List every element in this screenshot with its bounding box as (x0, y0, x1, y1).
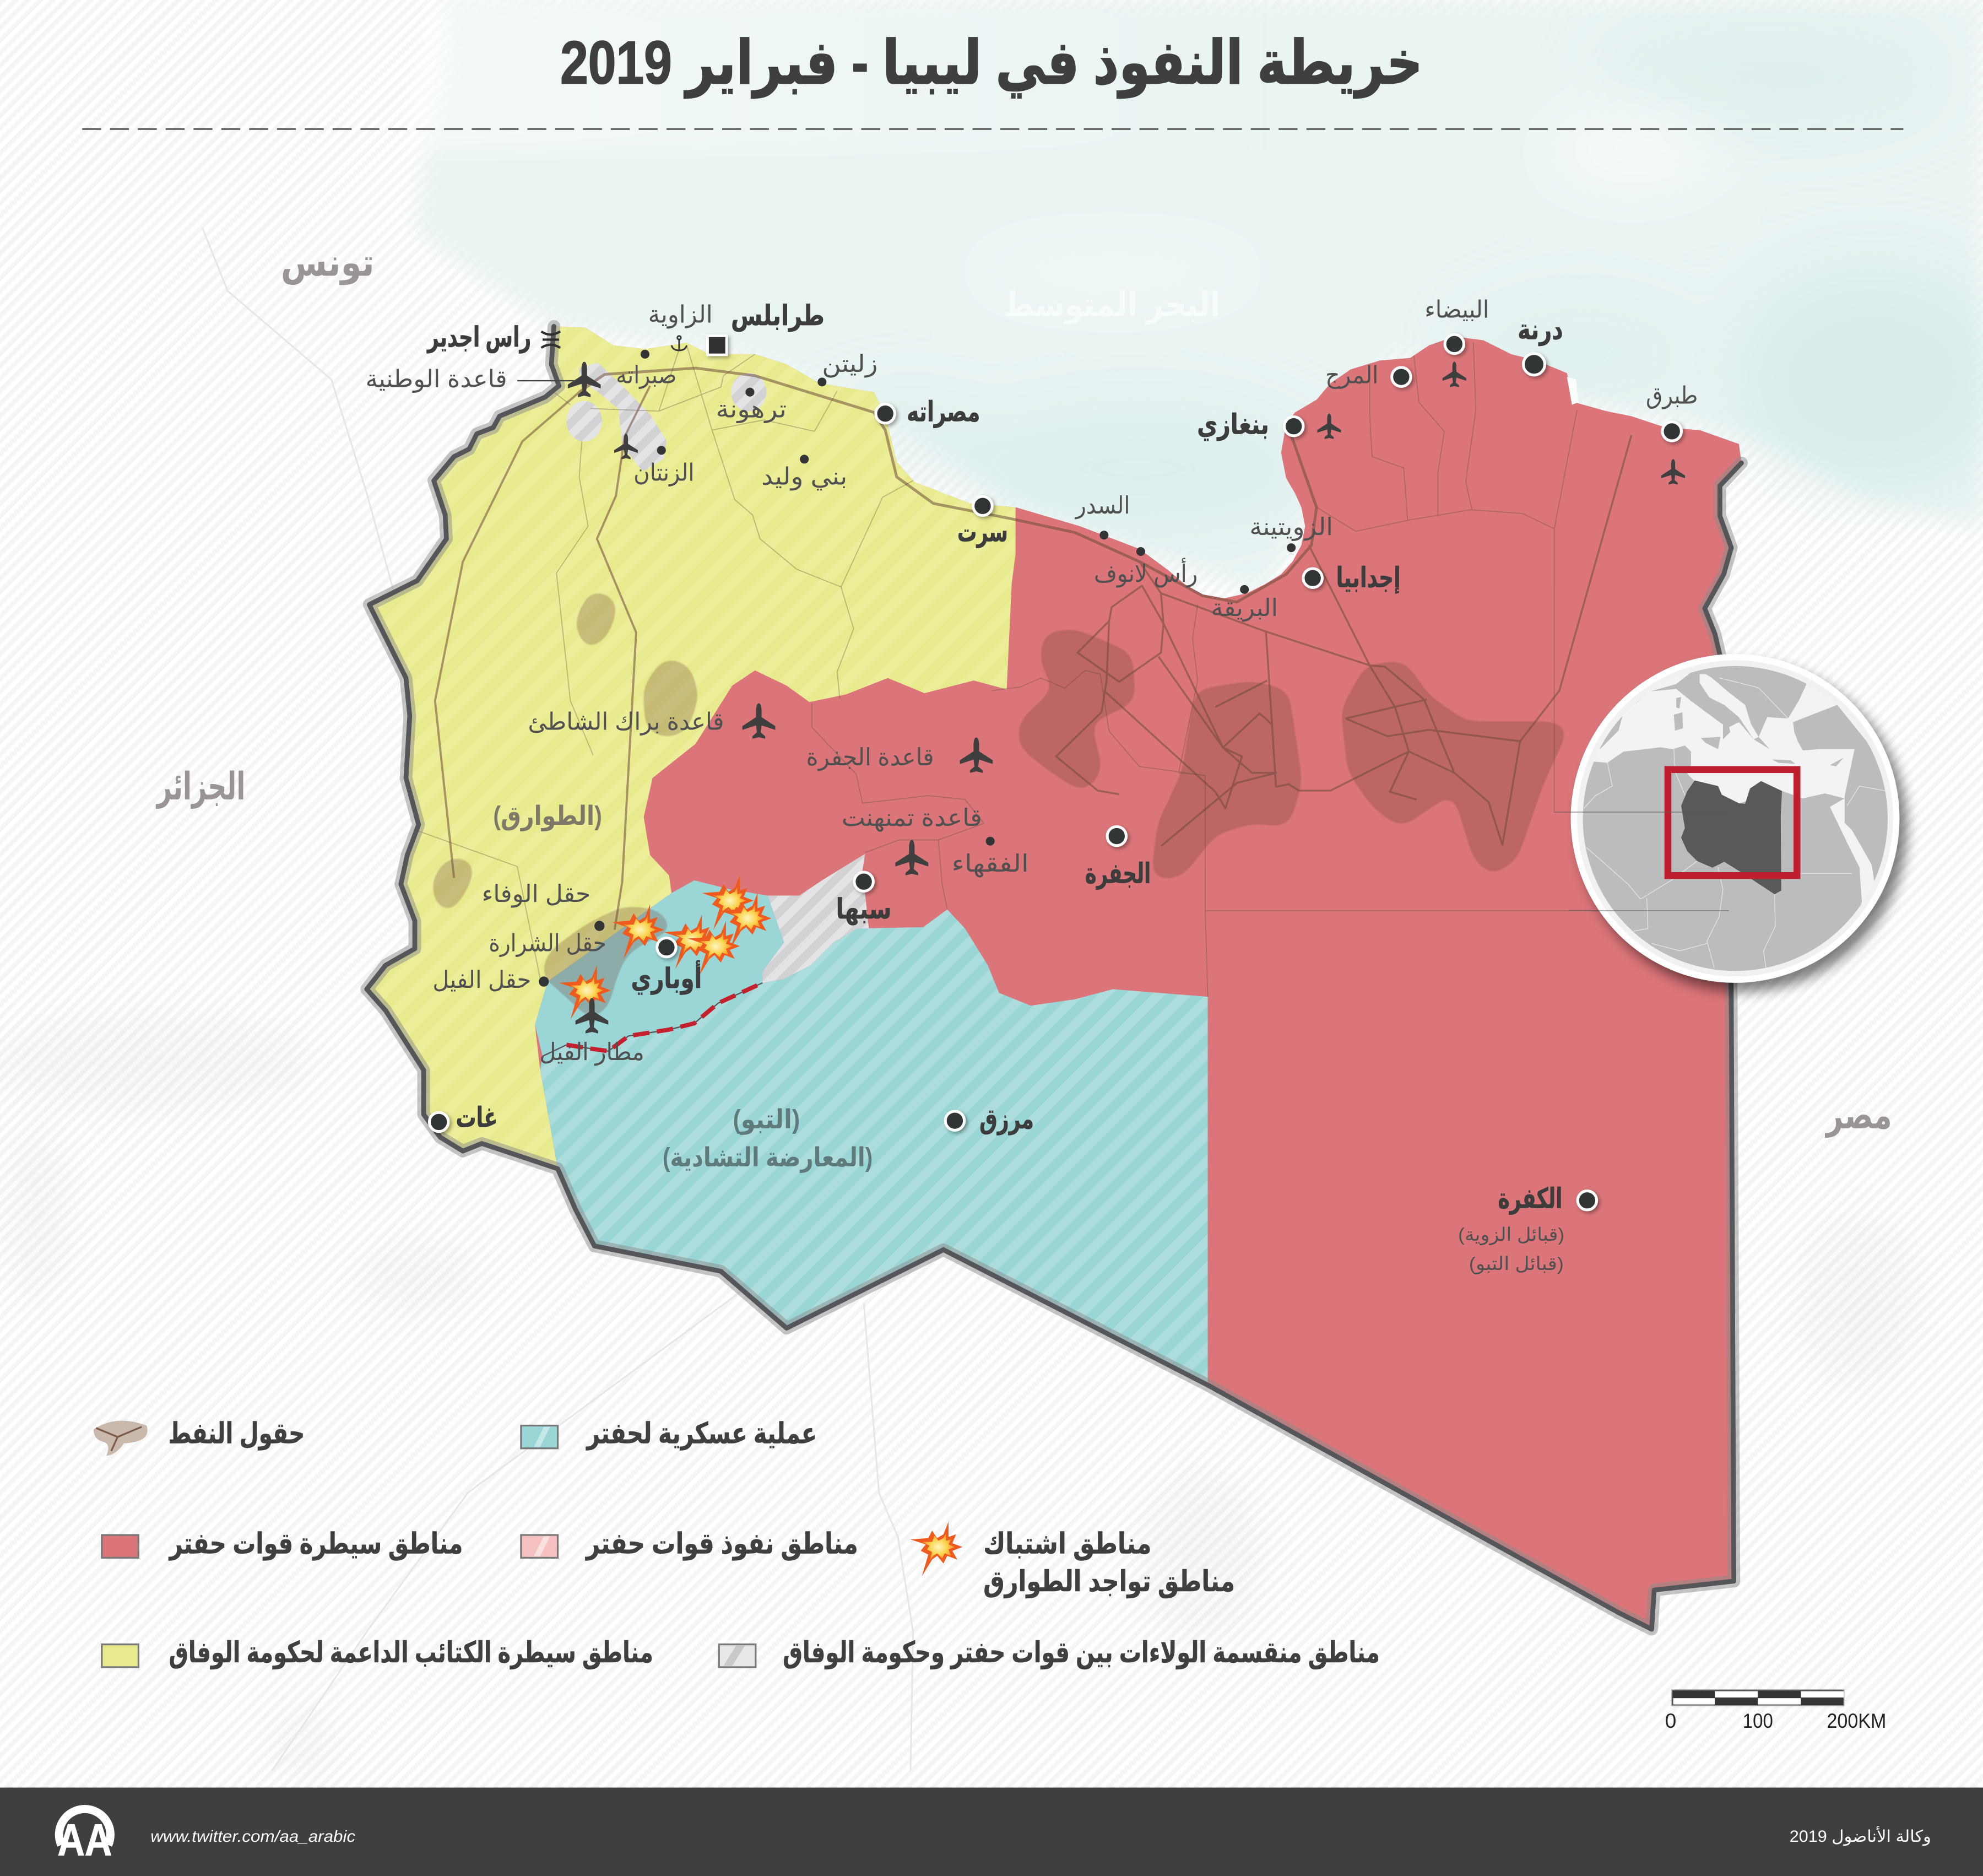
legend: Haftar influence (521, 1527, 858, 1560)
label: Algeria: الجزائر (156, 765, 245, 809)
label: Fuqaha: الفقهاء (952, 851, 1029, 878)
legend: Haftar control (102, 1527, 463, 1560)
oil fields (439, 597, 1561, 1012)
label: El Feel airport: مطار الفيل (539, 1039, 644, 1066)
label: Zliten: زليتن (822, 351, 877, 378)
swatch: pink (521, 1535, 557, 1558)
globe inner ring (1577, 660, 1893, 976)
region: Haftar military operation, south (striped teal) (540, 910, 1208, 1385)
swatch: teal (521, 1425, 557, 1448)
label: Tuareg: (الطوارق) (493, 801, 602, 831)
label: Sirte: سرت (957, 516, 1008, 549)
region: divided loyalties near Sebha (grey) (762, 854, 869, 983)
district boundaries (415, 343, 1729, 997)
Spain land (1581, 693, 1639, 749)
label: Chadian opposition: (المعارضة التشادية) (663, 1143, 873, 1173)
label: Tunisia: تونس (281, 241, 375, 285)
clash explosions (559, 875, 772, 1019)
text: military operation: عملية عسكرية لحفتر (586, 1418, 817, 1451)
faint desert texture (0, 1012, 1922, 1783)
label: Zawiya: الزاوية (648, 301, 713, 328)
label: Ghat: غات (456, 1102, 497, 1133)
text: oil fields: حقول النفط (168, 1418, 305, 1451)
mediterranean sea (405, 0, 1983, 594)
label: Tobruk: طبرق (1646, 382, 1698, 409)
twitter handle: www.twitter.com/aa_arabic (150, 1828, 355, 1846)
country borders (1584, 678, 1887, 968)
Africa land (1567, 745, 1862, 978)
pipelines and roads (435, 368, 1632, 929)
label: Ubari: أوباري (631, 960, 702, 995)
map of Libya (367, 326, 1741, 1629)
label: Ras Ajdir: راس اجدير (426, 321, 531, 354)
sea tone patches (835, 25, 1983, 531)
legend: military operation (521, 1418, 817, 1451)
globe shadow (1578, 663, 1907, 992)
label: Sebha: سبها (836, 893, 892, 926)
scale bar (1665, 1690, 1886, 1732)
label: Jufra base: قاعدة الجفرة (806, 744, 934, 771)
region: divided loyalties west Nafusa (567, 401, 602, 441)
legend: Tuareg presence text: مناطق تواجد الطوارق (983, 1565, 1235, 1598)
front line dashed road (543, 983, 762, 1056)
minor location dots (539, 350, 1296, 987)
swatch: red (102, 1535, 138, 1558)
label: Sabratha: صبراته (616, 363, 676, 390)
label: Watiya base: قاعدة الوطنية (366, 366, 507, 393)
label: Tamanhint base: قاعدة تمنهنت (842, 805, 982, 832)
icon: Tripoli capital square (708, 336, 727, 355)
label: Murzuq: مرزق (979, 1103, 1034, 1136)
label: Ras Lanuf: رأس لانوف (1094, 558, 1198, 588)
national border (367, 326, 1741, 1629)
locator red frame (1668, 770, 1797, 875)
label: Sidra: السدر (1075, 493, 1130, 520)
scale labels: 200KM (1827, 1710, 1886, 1732)
Sardinia, Corsica, Sicily, Crete, Cyprus (1674, 697, 1844, 766)
map lines crossing the globe (1554, 812, 1729, 911)
label: Derna: درنة (1518, 313, 1563, 345)
Italy heel (1723, 717, 1739, 723)
footer bar (0, 1787, 1983, 1876)
icon: Zawiya anchor (671, 336, 687, 350)
label: Benghazi: بنغازي (1197, 408, 1269, 440)
major city dots (429, 334, 1681, 1210)
legend: oil fields (94, 1418, 305, 1456)
label: Zintan: الزنتان (633, 459, 694, 486)
Arabia land (1845, 747, 1892, 883)
region: Haftar-controlled areas (red) (367, 326, 1741, 1629)
legend: clashes (911, 1522, 1151, 1576)
air base icons (568, 361, 1685, 1034)
label: Brega: البريقة (1211, 595, 1278, 622)
label: Bayda: البيضاء (1424, 296, 1489, 323)
globe map (1567, 663, 1892, 978)
label: Tripoli: طرابلس (731, 300, 825, 332)
label: Sharara field: حقل الشرارة (489, 930, 606, 957)
city labels (366, 296, 1698, 1274)
label: Kufra: الكفرة (1498, 1183, 1563, 1215)
inset locator globe (1567, 654, 1907, 992)
Turkey land (1793, 705, 1873, 750)
label: Wafa field: حقل الوفاء (482, 881, 590, 908)
Libya highlighted (1681, 780, 1782, 894)
label: Jufra: الجفرة (1085, 858, 1151, 890)
label: Zuwayya tribes: (قبائل الزوية) (1458, 1225, 1564, 1245)
icon: Ras Ajdir crossing (541, 332, 560, 348)
label: El Feel field: حقل الفيل (432, 967, 531, 993)
icon: explosion (911, 1522, 962, 1576)
neighbouring country labels (156, 241, 1892, 1138)
globe white ring (1571, 654, 1899, 983)
scale labels: 100 (1743, 1710, 1773, 1732)
label: Brak al-Shati base: قاعدة براك الشاطئ (528, 709, 724, 736)
text: divided loyalties: مناطق منقسمة الولاءات بين قوات حفتر وحكومة الوفاق (783, 1636, 1380, 1669)
icon: oil field (94, 1421, 148, 1456)
swatch: yellow (102, 1645, 138, 1667)
text: GNA-aligned brigades: مناطق سيطرة الكتائب الداعمة لحكومة الوفاق (169, 1636, 653, 1669)
title dashed divider (82, 128, 1903, 129)
credit line: وكالة الأناضول 2019 (1790, 1825, 1931, 1846)
region: GNA-aligned areas (yellow) (367, 326, 1016, 1169)
scale labels: 0 (1665, 1710, 1676, 1732)
region: Haftar military operation, Ubari (solid teal) (535, 880, 784, 1056)
text: Haftar influence: مناطق نفوذ قوات حفتر (585, 1527, 858, 1560)
label: Egypt: مصر (1825, 1094, 1892, 1138)
Adriatic Sea (1700, 674, 1759, 739)
region: divided loyalties Zintan belt (583, 367, 663, 467)
faint neighbouring borders (202, 228, 913, 1771)
legend: divided loyalties (719, 1636, 1380, 1669)
text: Haftar control: مناطق سيطرة قوات حفتر (168, 1527, 463, 1560)
scale labels (1665, 1710, 1886, 1732)
text: clashes: مناطق اشتباك (983, 1527, 1151, 1560)
label: Mediterranean Sea: البحر المتوسط (1003, 286, 1221, 325)
swatch: grey hatch (719, 1645, 756, 1667)
label: Tarhuna: ترهونة (716, 397, 787, 424)
title: خريطة النفوذ في ليبيا - فبراير 2019 (560, 29, 1423, 99)
Northern Mediterranean land (1650, 663, 1807, 749)
label: Zueitina: الزويتينة (1249, 514, 1333, 541)
label: Tebu tribes, Kufra: (قبائل التبو) (1469, 1254, 1564, 1274)
legend (94, 1418, 1380, 1669)
label: Ajdabiya: إجدابيا (1336, 561, 1401, 594)
label: Bani Walid: بني وليد (761, 463, 847, 490)
label: Marj: المرج (1325, 363, 1379, 390)
region: divided loyalties Tarhuna (731, 373, 766, 411)
AA logo: AA (57, 1815, 112, 1865)
label: Tebu: (التبو) (733, 1105, 800, 1135)
leader line to Watiya base (517, 380, 574, 381)
label: Misrata: مصراته (907, 396, 980, 429)
white notch at Gulf of Bomba (1567, 377, 1578, 405)
legend: GNA-aligned brigades (102, 1636, 653, 1669)
